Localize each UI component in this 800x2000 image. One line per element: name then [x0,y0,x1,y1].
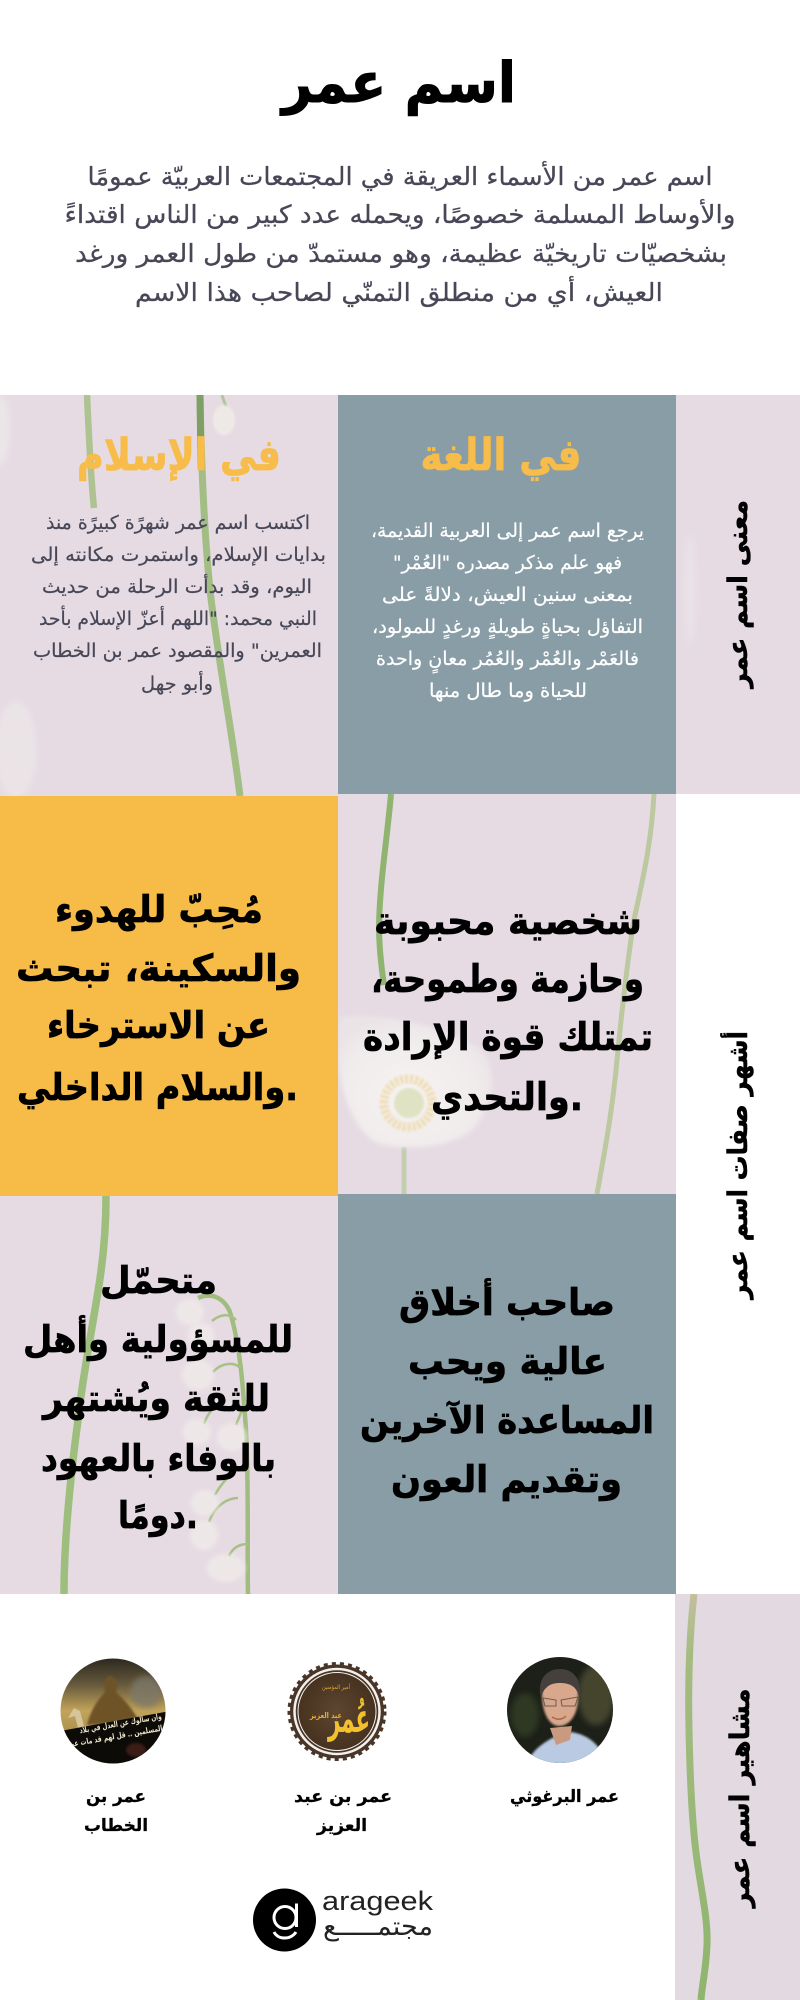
paragraph: in language: للحياة وما طال منها [429,680,587,702]
intro paragraph [64,160,736,308]
panel: responsible trait: متحمّل [100,1259,217,1302]
paragraph: in Islam: العمرين" والمقصود عمر بن الخطاب [33,640,322,662]
paragraph: in Islam: بدايات الإسلام، واستمرت مكانته إلى [31,544,326,567]
side heading: top traits: أشهر صفات اسم عمر [720,1031,754,1301]
panel: helpful trait: صاحب أخلاق [399,1278,615,1324]
panel: calm trait: والسلام الداخلي. [17,1066,298,1110]
portrait: robed figure [60,1658,166,1764]
panel: responsible trait: للمسؤولية وأهل [23,1315,293,1361]
logo: arageek community: مجتمـــــع [323,1912,433,1942]
panel: calm trait [0,796,338,1196]
paragraph: in language: فهو علم مذكر مصدره "العُمْر" [393,552,622,574]
name [294,1787,392,1836]
paragraph: in language: يرجع اسم عمر إلى العربية القديمة، [371,520,644,543]
panel: in language [338,395,676,794]
heading: in Islam: في الإسلام [77,430,281,481]
side panel: famous people [675,1594,800,2000]
intro paragraph: اسم عمر من الأسماء العريقة في المجتمعات العربيّة عمومًا [88,160,712,192]
person: Omar ibn Abdulaziz [290,1664,392,1836]
paragraph: in language: فالعَمْر والعُمْر والعُمُر معانٍ واحدة [376,648,639,674]
panel: beloved trait [338,794,676,1194]
person: Omar ibn al-Khattab [55,1658,170,1836]
name: العزيز [316,1816,367,1836]
person: Omar Barghouti [505,1655,619,1807]
paragraph: in Islam: اليوم، وقد بدأت الرحلة من حديث [42,574,312,598]
paragraph: in language: التفاؤل بحياةٍ طويلةٍ ورغدٍ للمولود، [372,616,643,639]
seal emblem: عُمر [327,1696,370,1742]
name [84,1787,148,1836]
name: عمر بن [86,1787,146,1807]
seal emblem: عبد العزيز [309,1711,342,1720]
panel: helpful trait: المساعدة الآخرين [360,1399,654,1442]
intro paragraph: بشخصيّات تاريخيّة عظيمة، وهو مستمدّ من طول العمر ورغد [75,239,727,269]
panel: responsible trait: بالوفاء بالعهود [41,1437,276,1480]
panel: responsible trait: للثقة ويُشتهر [41,1377,270,1420]
name: عمر بن عبد [294,1787,392,1807]
stems and petals background [0,395,240,798]
panel: helpful trait: عالية ويحب [408,1340,607,1383]
side heading: famous people: مشاهير اسم عمر [725,1688,756,1909]
name: عمر البرغوثي [510,1787,619,1807]
paragraph: in Islam: اكتسب اسم عمر شهرًة كبيرًة منذ [46,512,310,534]
side panel: meaning of the name [676,395,800,794]
intro paragraph: العيش، أي من منطلق التمنّي لصاحب هذا الاسم [135,275,663,308]
intro paragraph: والأوساط المسلمة خصوصًا، ويحمله عدد كبير من الناس اقتداءً [64,198,736,230]
paragraph: in language [371,520,644,702]
panel: beloved trait: وحازمة وطموحة، [371,957,644,1002]
portrait: robed figure: المسلمين .. قل لهم قد مات عمر [65,1724,163,1750]
seal emblem: أمير المؤمنين [322,1683,350,1691]
portrait: man with glasses [507,1657,613,1763]
panel: in Islam [0,395,338,798]
panel: helpful trait: وتقديم العون [391,1458,622,1501]
heading: in language: في اللغة [420,430,582,481]
stems and lily flowers [64,1196,248,1594]
panel: calm trait: مُحِبّ للهدوء [55,888,263,931]
panel: beloved trait: والتحدي. [431,1075,583,1120]
portrait: robed figure: وان سالوك عن العدل في بلاد [79,1712,162,1735]
panel: responsible trait [0,1196,338,1594]
panel: beloved trait: تمتلك قوة الإرادة [363,1015,653,1059]
paragraph: in Islam: النبي محمد: "اللهم أعزّ الإسلام بأحد [39,605,317,630]
side heading: meaning: معنى اسم عمر [723,500,754,690]
title: اسم عمر [279,51,516,116]
panel: calm trait: عن الاسترخاء [47,1004,270,1047]
paragraph: in language: بمعنى سنين العيش، دلالةً على [382,584,633,606]
logo mark [253,1888,316,1952]
paragraph: in Islam [31,512,326,695]
panel: beloved trait: شخصية محبوبة [374,899,642,943]
name: الخطاب [84,1816,148,1836]
panel: responsible trait: دومًا. [118,1494,198,1537]
logo: arageek community [253,1886,434,1952]
logo wordmark: arageek [322,1886,434,1916]
panel: helpful trait [338,1194,676,1594]
panel: calm trait: والسكينة، تبحث [16,947,301,990]
paragraph: in Islam: وأبو جهل [141,671,213,695]
stems and flower [338,794,654,1194]
seal emblem [290,1664,384,1758]
